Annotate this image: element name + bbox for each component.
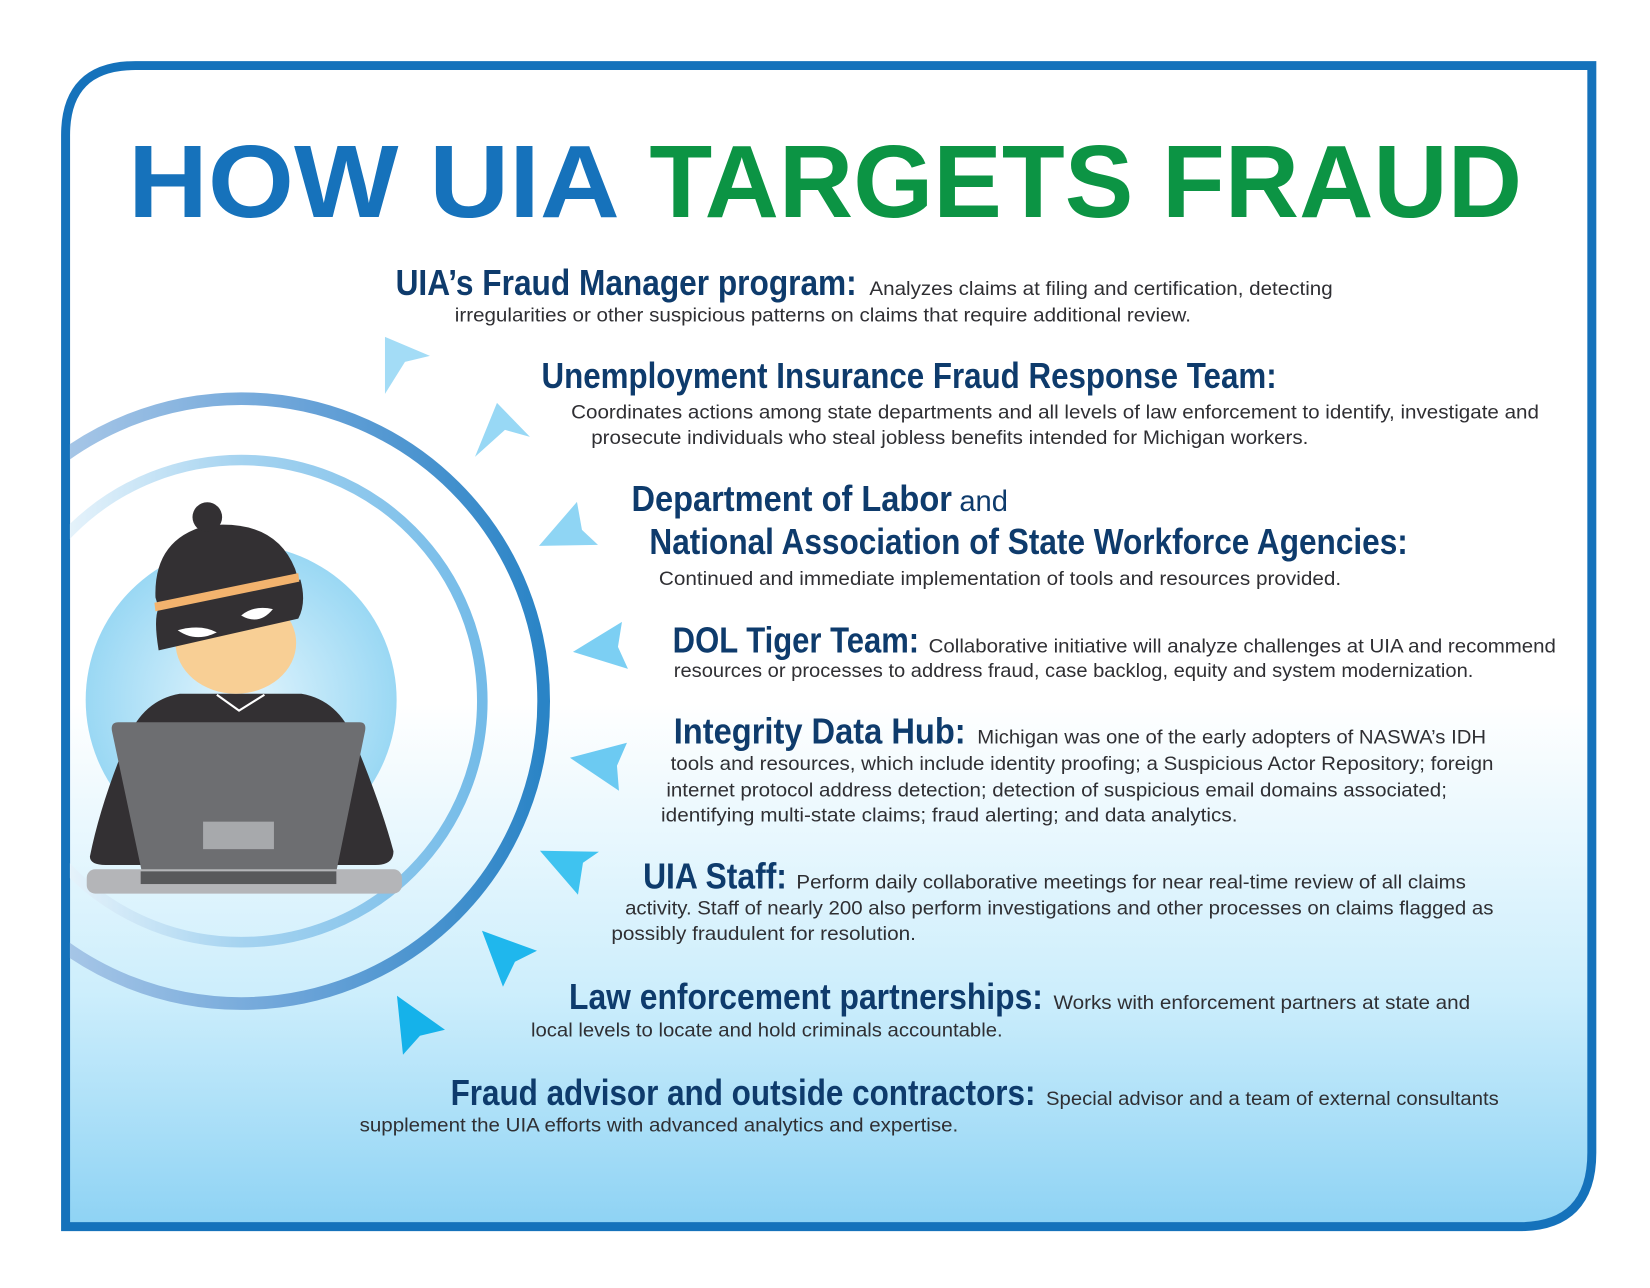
item: Law enforcement partnerships: Works with enforcement partners at state and [1053,992,1470,1014]
icon: thief at laptop [87,502,402,894]
title: HOW UIA [128,124,620,239]
item: Integrity Data Hub: tools and resources, which include identity proofing; a Suspicious Actor Repository; foreign [671,753,1493,775]
item: Fraud advisor and outside contractors: Fraud advisor and outside contractors: [451,1072,1035,1113]
target rings illustration [0,399,544,1004]
item: Integrity Data Hub [661,710,1493,827]
item: Fraud Response Team: Unemployment Insurance Fraud Response Team: [542,355,1277,396]
title: TARGETS FRAUD [649,124,1522,239]
item: UIA Staff: Perform daily collaborative meetings for near real-time review of all claims [796,871,1466,893]
item: Fraud advisor and outside contractors: supplement the UIA efforts with advanced analytics and expertise. [360,1114,958,1136]
item: Fraud Manager program: irregularities or other suspicious patterns on claims that require additional review. [455,304,1191,326]
item: Law enforcement partnerships: Law enforcement partnerships: [569,976,1043,1017]
item: Department of Labor and NASWA: and [959,485,1008,518]
item: UIA Staff [611,855,1494,945]
item: Fraud Manager program: Analyzes claims at filing and certification, detecting [869,278,1333,300]
item: Fraud Response Team: Coordinates actions among state departments and all levels of law enforcement to identify, investigate and [571,402,1539,424]
item: Fraud advisor and outside contractors: Special advisor and a team of external consultants [1046,1088,1499,1110]
item: Integrity Data Hub: Michigan was one of the early adopters of NASWA’s IDH [977,726,1486,748]
item: Department of Labor and NASWA [631,478,1408,590]
item: Fraud Response Team [542,355,1539,449]
item: UIA Staff: activity. Staff of nearly 200 also perform investigations and other processes on claims flagged as [625,898,1494,920]
item: Law enforcement partnerships: local levels to locate and hold criminals accountable. [531,1019,1003,1041]
item: DOL Tiger Team: DOL Tiger Team: [673,619,919,660]
item: UIA Staff: UIA Staff: [643,855,787,896]
item: DOL Tiger Team [673,619,1556,682]
item: Department of Labor and NASWA: National Association of State Workforce Agencies: [649,521,1408,562]
item: Fraud Response Team: prosecute individuals who steal jobless benefits intended for Michigan workers. [591,427,1308,449]
item: Fraud advisor and outside contractors [360,1072,1499,1136]
item: DOL Tiger Team: Collaborative initiative will analyze challenges at UIA and recommend [929,635,1556,657]
item: Integrity Data Hub: Integrity Data Hub: [674,710,966,751]
arrows pointing at thief [385,337,628,1055]
title [128,124,1522,239]
item: Department of Labor and NASWA: Continued and immediate implementation of tools and resources provided. [659,568,1341,590]
item: UIA Staff: possibly fraudulent for resolution. [611,923,916,945]
item: DOL Tiger Team: resources or processes to address fraud, case backlog, equity and system modernization. [674,660,1473,682]
item: Fraud Manager program: UIA’s Fraud Manager program: [396,262,857,303]
item: Integrity Data Hub: identifying multi-state claims; fraud alerting; and data analytics. [661,805,1237,827]
item: Fraud Manager program [396,262,1333,326]
item: Integrity Data Hub: internet protocol address detection; detection of suspicious email domains associated; [666,779,1447,801]
item: Law enforcement partnerships [531,976,1470,1041]
item: Department of Labor and NASWA: Department of Labor [631,478,952,519]
